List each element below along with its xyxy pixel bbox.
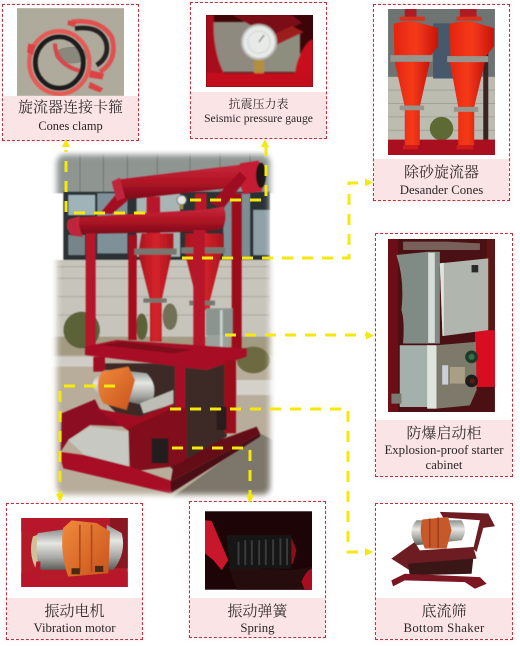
starter English label: Explosion-proof starter — [384, 443, 504, 457]
gauge caption band — [191, 92, 326, 138]
cones clamp Chinese label: 旋流器连接卡箍 — [18, 100, 123, 116]
panel: cones clamp — [2, 4, 139, 141]
central photo: desander machine — [52, 151, 274, 499]
photo: two cones — [388, 9, 495, 155]
leader: spring — [172, 448, 250, 495]
shaker deck — [61, 399, 128, 452]
leader: vibration motor — [60, 386, 115, 495]
leader: bottom shaker — [170, 409, 366, 552]
vibration motor caption band — [7, 598, 142, 639]
arrowhead: spring — [246, 495, 254, 503]
arrowhead: desander cones — [365, 178, 373, 186]
panel: vibration motor — [6, 503, 143, 640]
arrowhead: pressure gauge — [261, 139, 269, 147]
background: building and wall — [50, 150, 277, 500]
starter English label second line: cabinet — [426, 458, 462, 472]
shadow under platform — [103, 363, 227, 470]
panel: desander cones — [373, 4, 510, 201]
desander Chinese label: 除砂旋流器 — [404, 165, 479, 181]
spring caption band — [190, 598, 325, 637]
gauge Chinese label: 抗震压力表 — [228, 97, 288, 111]
gauge — [177, 195, 186, 205]
photo: clamp rings — [17, 8, 124, 96]
photo: pressure gauge — [206, 15, 313, 87]
vibration motor English label: Vibration motor — [33, 621, 116, 635]
desander caption band — [374, 159, 509, 200]
photo: starter cabinet — [388, 239, 495, 412]
starter box — [206, 308, 233, 335]
spring Chinese label: 振动弹簧 — [227, 604, 288, 620]
motor — [93, 370, 154, 407]
upper manifold pipe — [120, 164, 242, 200]
desander English label: Desander Cones — [400, 183, 483, 197]
bottom shaker caption band — [376, 598, 512, 639]
leader: desander cones — [182, 183, 364, 258]
cones clamp English label: Cones clamp — [38, 119, 103, 133]
bottom shaker Chinese label: 底流筛 — [421, 604, 466, 620]
leader: cones clamp — [66, 150, 145, 213]
panel: seismic pressure gauge — [190, 2, 327, 139]
cones — [147, 197, 160, 237]
platform — [85, 340, 247, 370]
leader: starter cabinet — [225, 334, 366, 336]
vibration motor Chinese label: 振动电机 — [44, 604, 104, 620]
gauge English label: Seismic pressure gauge — [204, 112, 313, 125]
spring English label: Spring — [240, 621, 275, 635]
arrowhead: bottom shaker — [365, 548, 373, 556]
cones clamp caption band — [3, 96, 138, 140]
arrowhead: vibration motor — [56, 494, 64, 502]
photo: spring — [205, 511, 312, 590]
front posts — [86, 233, 96, 347]
starter caption band — [376, 420, 512, 476]
bottom shaker English label: Bottom Shaker — [403, 621, 485, 635]
arrowhead: starter cabinet — [366, 332, 374, 340]
arrowhead: cones clamp — [62, 139, 70, 147]
panel: explosion-proof starter cabinet — [375, 233, 513, 477]
panel: spring — [189, 501, 326, 638]
photo: bottom shaker — [391, 512, 495, 589]
lower manifold pipe — [77, 207, 225, 234]
leader: pressure gauge — [190, 146, 266, 200]
rear posts — [128, 235, 137, 340]
photo: vibration motor — [21, 518, 128, 587]
starter Chinese label: 防爆启动柜 — [406, 426, 482, 442]
panel: bottom shaker — [375, 503, 513, 640]
